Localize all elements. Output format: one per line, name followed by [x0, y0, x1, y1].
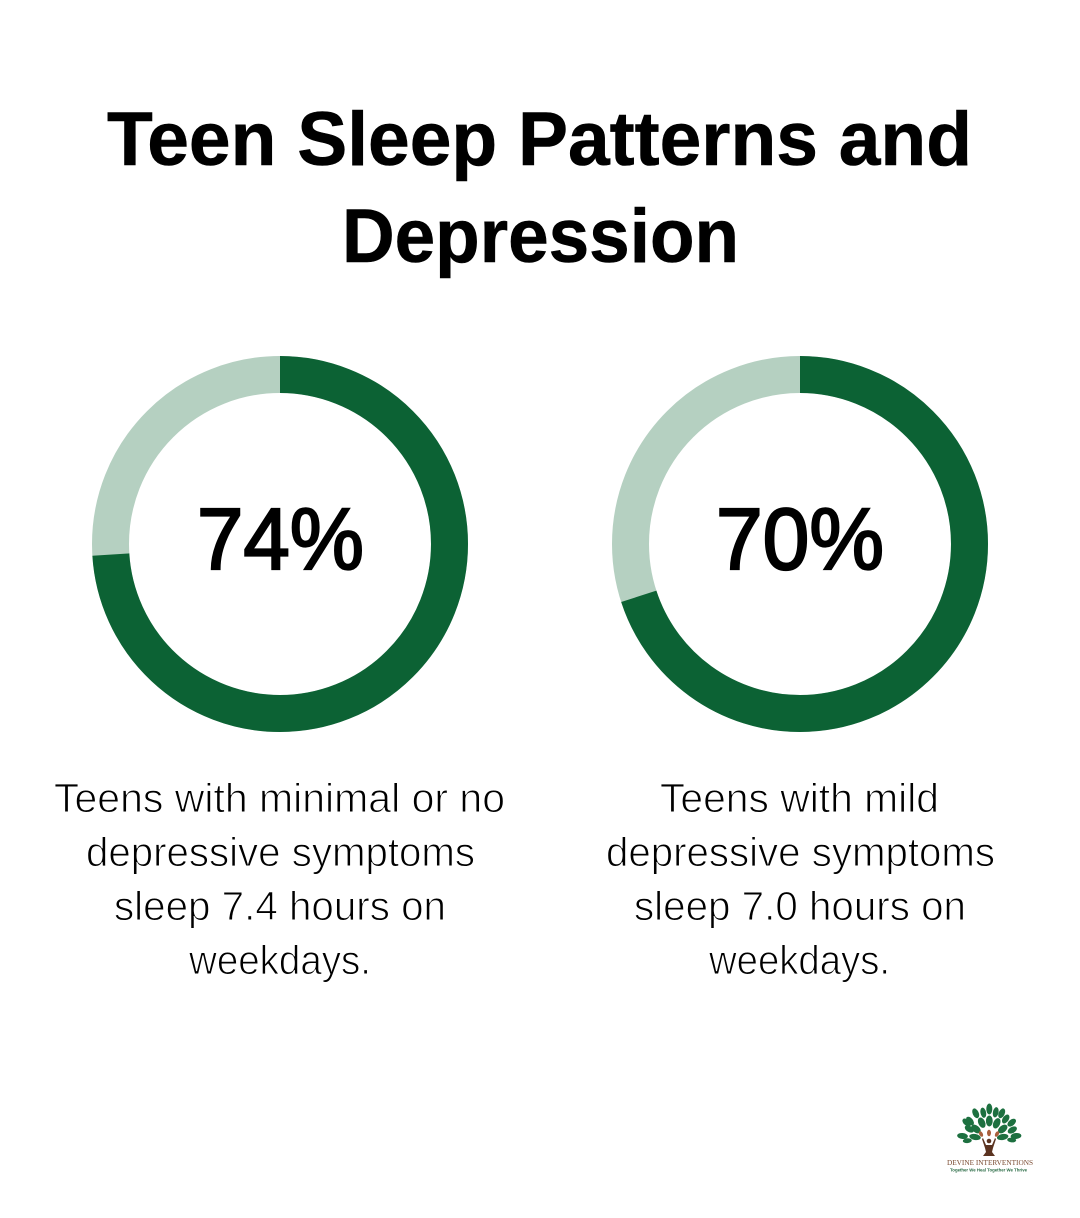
description: mild symptoms: weekdays.	[708, 937, 890, 983]
logo: Devine Interventions	[947, 1104, 1033, 1174]
title	[107, 97, 972, 279]
description: mild symptoms: Teens with mild	[660, 775, 939, 821]
title: Teen Sleep Patterns and	[107, 97, 972, 182]
description: mild symptoms: depressive symptoms	[606, 829, 995, 875]
description: minimal or no symptoms: Teens with minimal or no	[54, 775, 505, 821]
donut chart: 74%	[110, 374, 450, 714]
percentage: 70%: 70%	[716, 491, 884, 588]
description: mild symptoms: sleep 7.0 hours on	[634, 883, 966, 929]
panel: 70% stat	[606, 374, 995, 983]
icon: tree	[957, 1104, 1022, 1156]
description: minimal or no symptoms: weekdays.	[188, 937, 371, 983]
percentage: 74%: 74%	[197, 491, 364, 588]
panel: 74% stat	[54, 374, 505, 983]
logo name: DEVINE INTERVENTIONS	[947, 1158, 1033, 1167]
description: minimal or no symptoms	[54, 775, 505, 983]
donut chart: 70%	[630, 374, 970, 714]
description: minimal or no symptoms: depressive symptoms	[86, 829, 475, 875]
description: minimal or no symptoms: sleep 7.4 hours on	[114, 883, 446, 929]
description: mild symptoms	[606, 775, 995, 983]
logo tagline: Together We Heal Together We Thrive	[950, 1168, 1027, 1174]
title: Depression	[342, 194, 739, 279]
